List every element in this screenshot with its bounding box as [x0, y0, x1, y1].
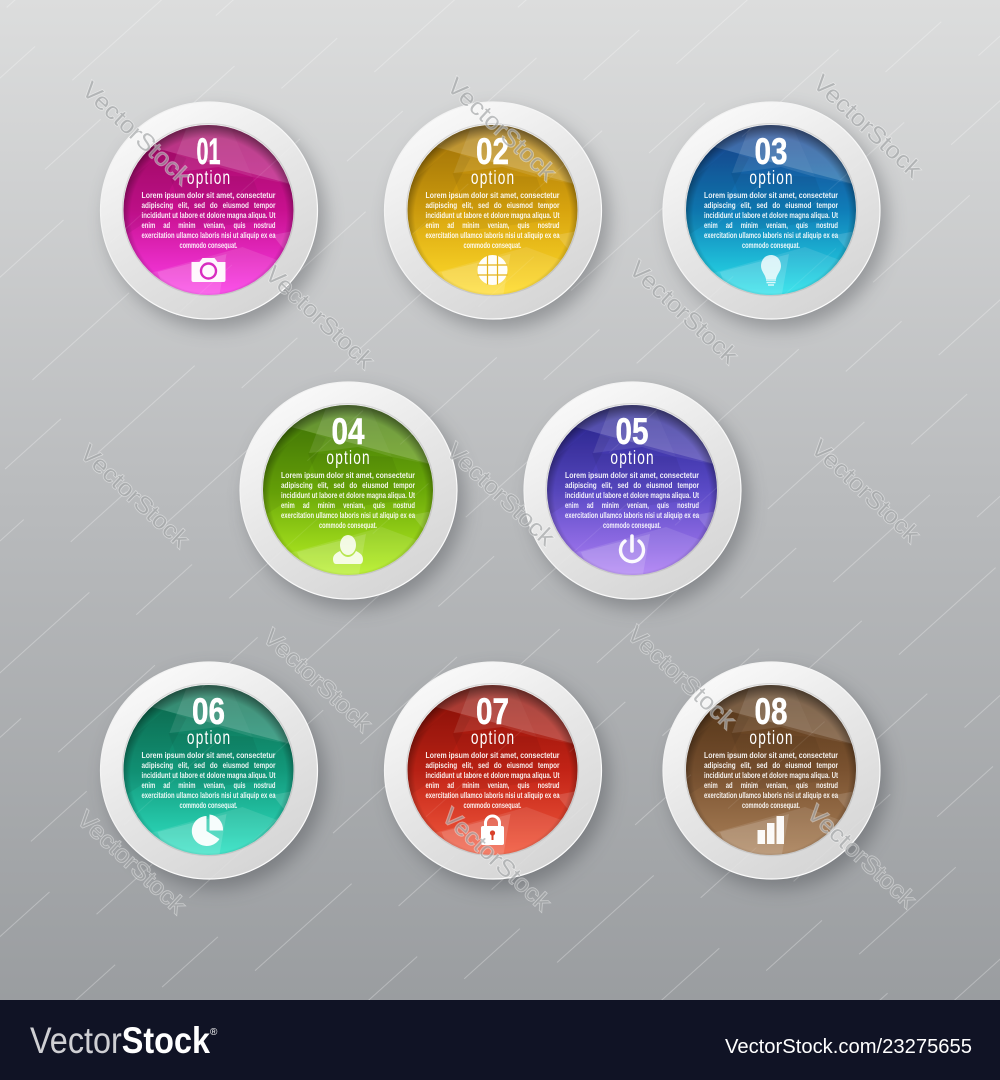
body text: incididunt ut labore et dolore magna aliqua. Ut	[142, 211, 276, 220]
watermarks: VectorStock	[257, 624, 378, 738]
body text: adipiscing elit, sed do eiusmod tempor	[704, 201, 839, 210]
number 08: 08	[754, 691, 788, 732]
watermarks: VectorStock	[801, 800, 922, 914]
body text: Lorem ipsum dolor sit amet, consectetur	[704, 191, 839, 200]
watermarks: VectorStock	[71, 806, 192, 920]
body text: commodo consequat.	[742, 241, 800, 250]
watermarks	[71, 70, 928, 920]
body text	[142, 191, 276, 250]
body text: commodo consequat.	[464, 241, 522, 250]
body text: commodo consequat.	[180, 241, 238, 250]
watermarks: VectorStock	[74, 440, 195, 554]
body text: incididunt ut labore et dolore magna aliqua. Ut	[426, 771, 560, 780]
number 05: 05	[616, 411, 648, 452]
panel: option 07	[384, 662, 602, 879]
body text	[426, 751, 560, 810]
panel: option 05	[524, 382, 741, 599]
watermarks: VectorStock	[76, 77, 197, 191]
number 06: 06	[192, 691, 225, 732]
body text: exercitation ullamco laboris nisi ut aliquip ex ea	[142, 791, 276, 800]
body text: adipiscing elit, sed do eiusmod tempor	[142, 761, 276, 770]
icon: light bulb	[761, 255, 781, 285]
panel: option 02	[384, 102, 602, 319]
body text: Lorem ipsum dolor sit amet, consectetur	[142, 751, 276, 760]
body text: adipiscing elit, sed do eiusmod tempor	[565, 481, 700, 490]
watermarks: VectorStock	[440, 438, 561, 552]
icon: padlock	[481, 816, 504, 845]
footer bar	[0, 1000, 1000, 1080]
body text: enim ad minim veniam, quis nostrud	[704, 781, 838, 790]
icon: globe	[478, 255, 508, 285]
body text: exercitation ullamco laboris nisi ut aliquip ex ea	[565, 511, 699, 520]
icon: user	[333, 535, 363, 564]
body text: adipiscing elit, sed do eiusmod tempor	[426, 761, 560, 770]
body text: incididunt ut labore et dolore magna aliqua. Ut	[426, 211, 560, 220]
body text: enim ad minim veniam, quis nostrud	[565, 501, 699, 510]
number 03: 03	[754, 131, 788, 172]
watermarks: VectorStock	[623, 256, 744, 370]
body text: Lorem ipsum dolor sit amet, consectetur	[426, 751, 560, 760]
watermarks: VectorStock	[807, 70, 928, 184]
body text: Lorem ipsum dolor sit amet, consectetur	[426, 191, 560, 200]
body text: enim ad minim veniam, quis nostrud	[142, 221, 276, 230]
body text: enim ad minim veniam, quis nostrud	[426, 221, 560, 230]
body text: Lorem ipsum dolor sit amet, consectetur	[565, 471, 700, 480]
body text	[426, 191, 560, 250]
icon: pie chart	[192, 814, 223, 846]
label option: option	[187, 727, 230, 749]
body text: incididunt ut labore et dolore magna aliqua. Ut	[281, 491, 415, 500]
body text: exercitation ullamco laboris nisi ut aliquip ex ea	[142, 231, 276, 240]
body text: adipiscing elit, sed do eiusmod tempor	[281, 481, 416, 490]
number 07: 07	[476, 691, 509, 732]
watermarks: VectorStock	[621, 621, 742, 735]
number 02: 02	[476, 131, 509, 172]
icon: bar chart	[758, 816, 784, 844]
watermarks: VectorStock	[441, 73, 562, 187]
label option: option	[471, 167, 514, 189]
panel: option 01	[100, 102, 318, 319]
body text	[704, 191, 839, 250]
panel: option 04	[240, 382, 457, 599]
body text	[281, 471, 416, 530]
watermarks: VectorStock	[436, 803, 557, 917]
body text: adipiscing elit, sed do eiusmod tempor	[426, 201, 560, 210]
body text: commodo consequat.	[180, 801, 238, 810]
body text: enim ad minim veniam, quis nostrud	[142, 781, 276, 790]
label option: option	[749, 727, 793, 749]
body text: commodo consequat.	[603, 521, 661, 530]
body text	[704, 751, 839, 810]
watermarks: VectorStock	[259, 261, 380, 375]
footer logo: VectorStock	[30, 1020, 210, 1061]
body text	[565, 471, 700, 530]
label option: option	[187, 167, 230, 189]
body text: commodo consequat.	[319, 521, 377, 530]
body text: enim ad minim veniam, quis nostrud	[426, 781, 560, 790]
body text: adipiscing elit, sed do eiusmod tempor	[142, 201, 276, 210]
body text: exercitation ullamco laboris nisi ut aliquip ex ea	[281, 511, 415, 520]
label option: option	[471, 727, 514, 749]
body text: exercitation ullamco laboris nisi ut aliquip ex ea	[426, 791, 560, 800]
footer url: VectorStock.com/23275655	[725, 1036, 972, 1058]
body text: Lorem ipsum dolor sit amet, consectetur	[281, 471, 416, 480]
body text: exercitation ullamco laboris nisi ut aliquip ex ea	[704, 231, 838, 240]
icon: power	[620, 536, 644, 562]
footer registered mark: ®	[210, 1027, 218, 1038]
body text: Lorem ipsum dolor sit amet, consectetur	[142, 191, 276, 200]
body text: incididunt ut labore et dolore magna aliqua. Ut	[704, 211, 838, 220]
label option: option	[326, 447, 370, 469]
icon: camera	[192, 258, 226, 282]
label option: option	[749, 167, 793, 189]
body text: enim ad minim veniam, quis nostrud	[281, 501, 415, 510]
body text: exercitation ullamco laboris nisi ut aliquip ex ea	[704, 791, 838, 800]
body text: incididunt ut labore et dolore magna aliqua. Ut	[565, 491, 699, 500]
body text: adipiscing elit, sed do eiusmod tempor	[704, 761, 839, 770]
label option: option	[610, 447, 654, 469]
body text: exercitation ullamco laboris nisi ut aliquip ex ea	[426, 231, 560, 240]
body text: incididunt ut labore et dolore magna aliqua. Ut	[142, 771, 276, 780]
body text: incididunt ut labore et dolore magna aliqua. Ut	[704, 771, 838, 780]
body text: enim ad minim veniam, quis nostrud	[704, 221, 838, 230]
panel: option 03	[663, 102, 880, 319]
body text: commodo consequat.	[742, 801, 800, 810]
body text: Lorem ipsum dolor sit amet, consectetur	[704, 751, 839, 760]
panel: option 06	[100, 662, 318, 879]
number 04: 04	[332, 411, 365, 452]
panel: option 08	[663, 662, 880, 879]
number 01: 01	[196, 131, 221, 172]
body text	[142, 751, 276, 810]
body text: commodo consequat.	[464, 801, 522, 810]
watermarks: VectorStock	[805, 435, 926, 549]
